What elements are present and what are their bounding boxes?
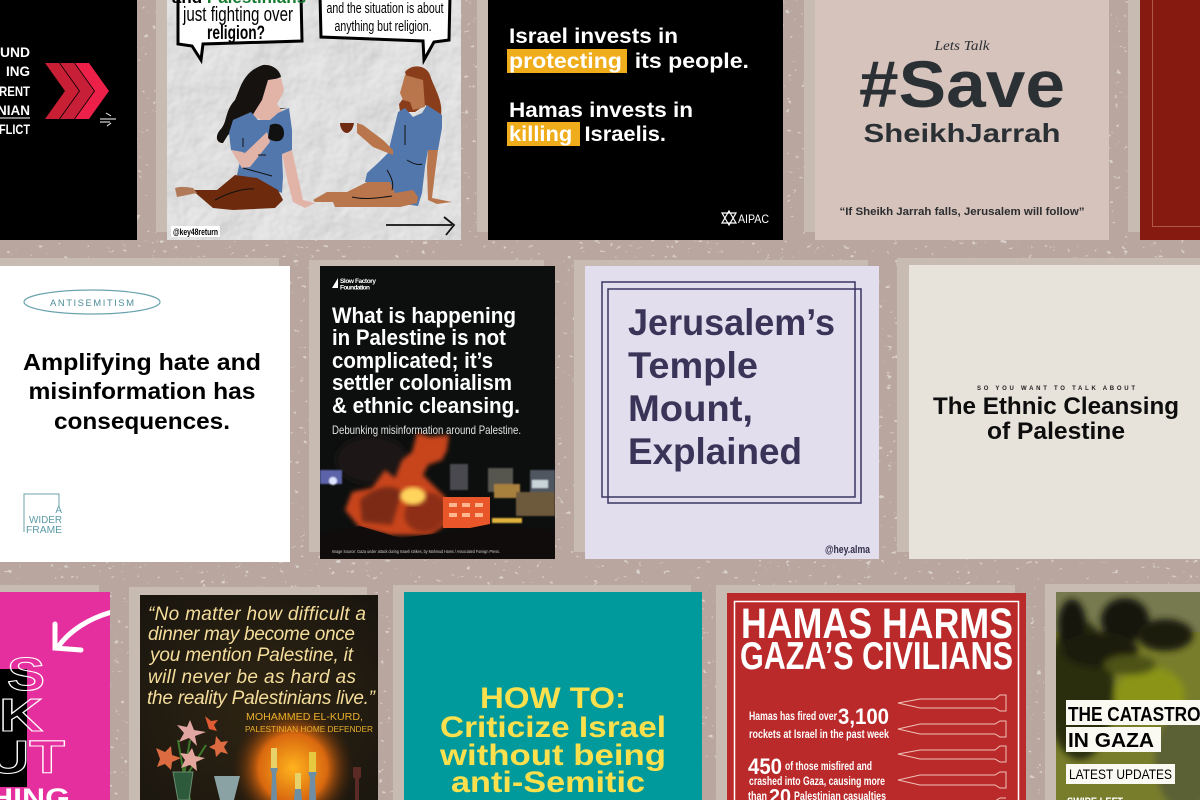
arrow: pointing down left (55, 612, 112, 650)
title labels: IN GAZA (1068, 729, 1154, 752)
statement text: Hamas invests in (509, 98, 693, 122)
icon: small logo mark (100, 113, 116, 126)
speech bubble: right answer (320, 0, 450, 60)
rocket icons (898, 695, 1006, 800)
painted flowers in vase (156, 716, 240, 800)
heading: cropped title lines (0, 44, 30, 137)
speech bubble: left question: religion? (207, 23, 265, 44)
pill label (24, 290, 160, 314)
statistic: rockets fired: rockets at Israel in the past week (749, 727, 889, 741)
quote text: will never be as hard as (148, 667, 356, 688)
attribution: MOHAMMED EL-KURD, (246, 711, 363, 723)
highlight: killing (507, 122, 580, 146)
pill label: ANTISEMITISM (50, 298, 134, 309)
A Wider Frame logo (24, 494, 62, 536)
panel: Save Sheikh Jarrah card: SheikhJarrah (864, 118, 1060, 148)
highlight: protecting (507, 49, 627, 73)
AIPAC logo: AIPAC (738, 214, 769, 226)
panel: Hamas harms civilians card (727, 593, 1026, 800)
panel: AIPAC statement card (488, 0, 783, 240)
panel: black conflict explainer card (0, 0, 137, 240)
candles (270, 748, 361, 800)
statement text: protecting its people. (509, 49, 749, 73)
double frame (602, 282, 861, 503)
black block (0, 669, 27, 787)
heading: misinformation has (28, 378, 256, 404)
Slow Factory logo (332, 278, 376, 290)
heading: consequences. (54, 408, 230, 434)
panel: illustrated conversation on crumpled paper (167, 0, 461, 240)
heading: & ethnic cleansing. (332, 393, 520, 418)
statistic: rockets fired (749, 704, 889, 741)
figure: left woman with cup (175, 65, 315, 210)
heading: The Ethnic Cleansing (933, 393, 1179, 420)
heading (628, 302, 835, 472)
panel: Save Sheikh Jarrah card (815, 0, 1109, 240)
icon: red chevrons (45, 63, 109, 119)
handle: @hey.alma (825, 544, 871, 556)
outlined title: S (7, 648, 45, 700)
heading (740, 600, 1013, 678)
quote text: dinner may become once (148, 624, 355, 645)
candle glow (231, 706, 355, 800)
panel: ethnic cleansing card: SO YOU WANT TO TALK ABOUT (977, 386, 1135, 392)
subheading: Debunking misinformation around Palestine. (332, 423, 521, 437)
heading: HAMAS HARMS (741, 600, 1013, 648)
figure: right woman with cup (313, 66, 452, 207)
title labels (1066, 700, 1200, 752)
smoke cloud (1046, 598, 1200, 800)
statistic: rockets fired: 3,100 (838, 704, 889, 729)
statement text (509, 24, 749, 146)
city buildings (320, 464, 555, 523)
heading (332, 303, 520, 418)
heading: in Palestine is not (332, 325, 507, 350)
panel: how to criticize card (404, 592, 702, 800)
arrow: swipe right (386, 217, 454, 235)
heading: Mount, (628, 388, 753, 429)
quote text: the reality Palestinians live.” (147, 688, 377, 709)
heading: cropped title lines: UND (0, 44, 30, 60)
quote text: “No matter how difficult a (148, 604, 366, 625)
panel: dark red card edge (1140, 0, 1200, 240)
panel: Save Sheikh Jarrah card: “If Sheikh Jarrah falls, Jerusalem will follow” (840, 206, 1084, 218)
heading: HOW TO: (480, 682, 626, 715)
panel: Mohammed El-Kurd quote card (140, 595, 378, 800)
heading: settler colonialism (332, 370, 512, 395)
Slow Factory logo: Slow Factory (340, 278, 376, 285)
panel: ethnic cleansing card (909, 265, 1200, 559)
heading: of Palestine (987, 418, 1125, 445)
heading: cropped title lines: FLICT (0, 121, 30, 137)
heading: Criticize Israel (440, 711, 666, 744)
AIPAC logo (722, 211, 769, 226)
attribution: PALESTINIAN HOME DEFENDER (245, 724, 373, 734)
statement text: killing Israelis. (509, 122, 666, 146)
heading: cropped title lines: RENT (0, 83, 30, 99)
statistic: misfired rockets: 450 (748, 754, 782, 779)
image credit: Image Source: Gaza under attack during Israeli strikes, by Mahmud Hams / Associated Foreign Press. (332, 549, 500, 554)
handle tag: @key48return (173, 227, 218, 237)
panel: Save Sheikh Jarrah card: Lets Talk (933, 39, 990, 54)
Slow Factory logo: Foundation (340, 284, 370, 292)
heading (439, 682, 666, 799)
speech bubble: left question (172, 0, 306, 60)
heading: What is happening (332, 303, 516, 328)
speech bubble: left question: just fighting over (182, 4, 293, 26)
panel: Save Sheikh Jarrah card: #Save (859, 47, 1065, 121)
heading (933, 393, 1179, 445)
A Wider Frame logo: WIDER (29, 515, 62, 526)
panel: catastrophe in Gaza card (1046, 592, 1200, 800)
statistic: misfired rockets: crashed into Gaza, causing more (749, 774, 885, 788)
A Wider Frame logo: FRAME (26, 525, 62, 536)
heading (23, 349, 261, 434)
panel: Slow Factory card (320, 266, 555, 559)
quote text (147, 604, 377, 709)
heading: anti-Semitic (451, 766, 645, 799)
heading: Amplifying hate and (23, 349, 261, 375)
explosion photo (320, 430, 555, 538)
heading: without being (439, 739, 666, 772)
heading: cropped title lines: ING (6, 63, 30, 79)
outlined title (0, 657, 66, 774)
statistic: misfired rockets: of those misfired and (785, 759, 872, 773)
A Wider Frame logo: A (55, 505, 62, 516)
statistic: misfired rockets (748, 754, 886, 800)
latest updates label: LATEST UPDATES (1069, 766, 1172, 782)
quote text: you mention Palestine, it (148, 645, 354, 666)
attribution (245, 711, 373, 734)
heading: Explained (628, 431, 802, 472)
speech bubble: right answer: anything but religion. (334, 18, 432, 35)
panel: antisemitism card (0, 266, 290, 562)
panel: pink talk card (0, 592, 112, 800)
heading: GAZA’S CIVILIANS (740, 635, 1013, 678)
statement text: Israel invests in (509, 24, 678, 48)
heading: Jerusalem’s (628, 302, 835, 343)
panel: Temple Mount card (585, 266, 879, 559)
speech bubble: right answer: and the situation is about (326, 0, 444, 17)
heading: complicated; it’s (332, 348, 493, 373)
heading: Temple (628, 345, 758, 386)
statistic: rockets fired: Hamas has fired over (749, 709, 837, 723)
